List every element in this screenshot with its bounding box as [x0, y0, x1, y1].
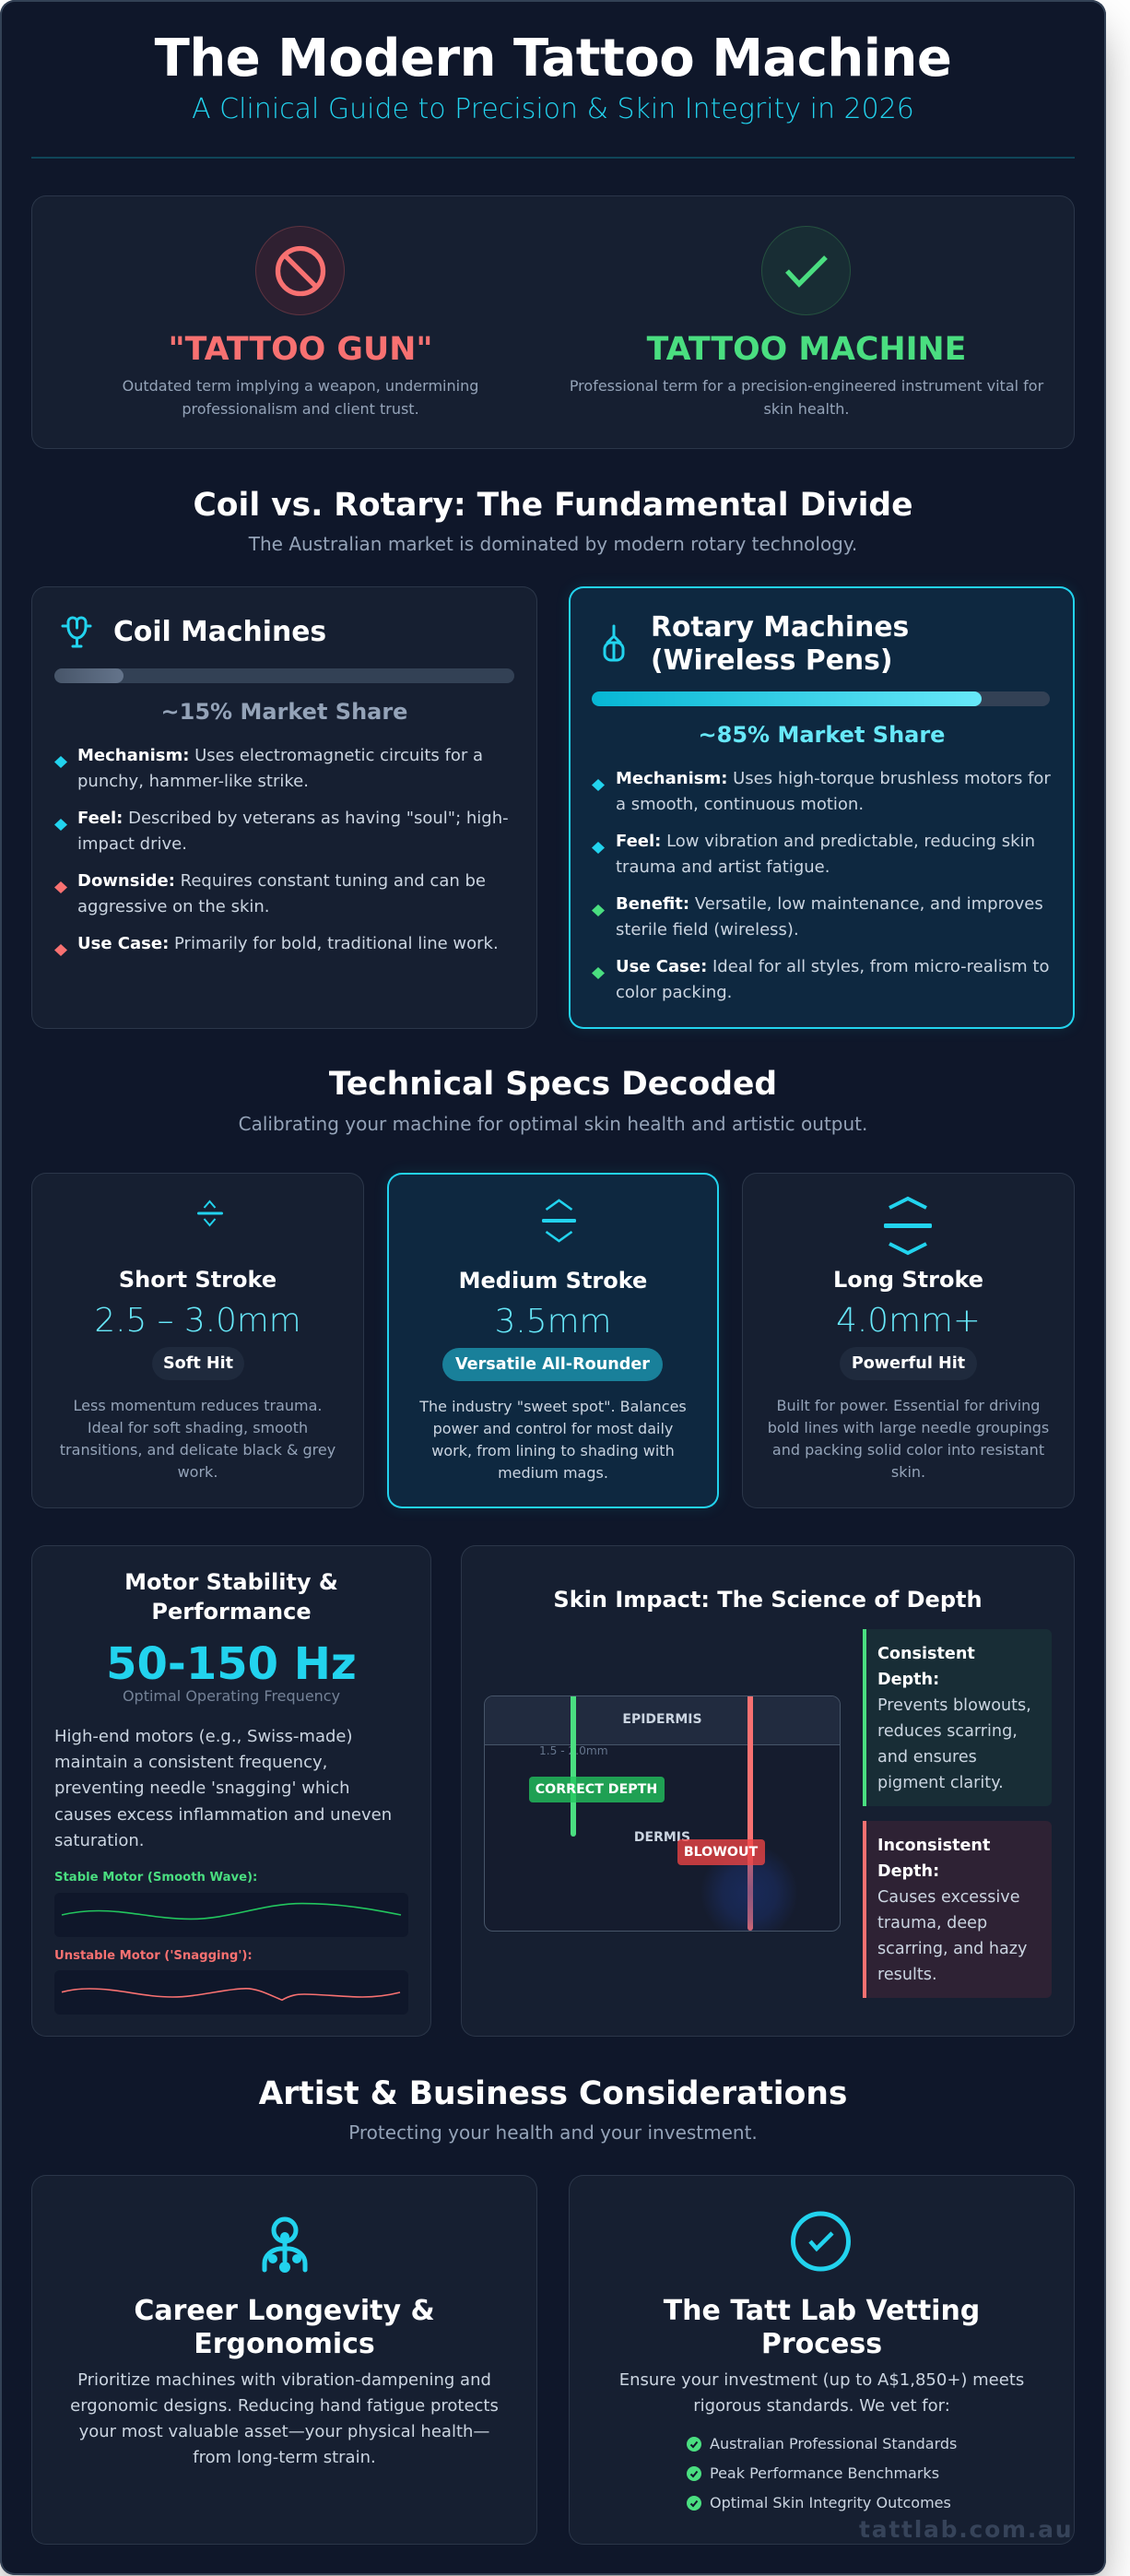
- section heading: artist and business: Artist & Business Considerations: [259, 2075, 847, 2112]
- correct term description: skin health.: [763, 400, 850, 418]
- medium stroke description: The industry "sweet spot". Balances: [419, 1398, 687, 1415]
- callout: inconsistent depth: results.: [877, 1966, 937, 1984]
- item: mechanism: [77, 746, 483, 791]
- short stroke description: Less momentum reduces trauma.: [74, 1397, 322, 1414]
- callout: inconsistent depth: [863, 1821, 1052, 1998]
- wrong term heading: "TATTOO GUN": [168, 331, 433, 368]
- frequency caption: Optimal Operating Frequency: [123, 1687, 340, 1705]
- rotary market share bar: [592, 691, 1050, 706]
- coil share label: ~15% Market Share: [161, 699, 407, 725]
- bullet: feel: [592, 842, 605, 854]
- item: downside: aggressive on the skin.: [77, 897, 270, 916]
- epidermis label: EPIDERMIS: [622, 1712, 702, 1727]
- panel: skin impact: [461, 1545, 1075, 2037]
- career description: [70, 2370, 499, 2467]
- item: benefit: Benefit: Versatile, low maintenance, and improves: [616, 894, 1043, 914]
- section subheading: calibrating: Calibrating your machine for optimal skin health and artistic output.: [239, 1113, 867, 1135]
- item: use case: Use Case: Ideal for all styles, from micro-realism to: [616, 957, 1049, 976]
- coil market share bar: [54, 668, 514, 683]
- medium stroke description: medium mags.: [498, 1464, 608, 1482]
- correct term description: Professional term for a precision-engineered instrument vital for: [570, 377, 1043, 395]
- career description: ergonomic designs. Reducing hand fatigue protects: [70, 2396, 499, 2416]
- panel: long stroke: [742, 1173, 1075, 1508]
- icon: medium stroke: [542, 1199, 576, 1243]
- medium stroke description: work, from lining to shading with: [431, 1442, 675, 1459]
- career description: Prioritize machines with vibration-dampening and: [77, 2370, 491, 2390]
- item: australian standards: Australian Professional Standards: [710, 2435, 957, 2452]
- dermis label: DERMIS: [634, 1830, 690, 1845]
- long stroke description: [768, 1397, 1049, 1481]
- career description: your most valuable asset—your physical health—: [79, 2422, 489, 2441]
- check: outcomes: [687, 2496, 701, 2511]
- section subheading: protecting: Protecting your health and your investment.: [348, 2121, 758, 2144]
- medium stroke badge: [442, 1348, 663, 1381]
- vetting title: [664, 2295, 980, 2360]
- motor description: causes excess inflammation and uneven: [54, 1805, 392, 1825]
- watermark: tattlab.com.au: [859, 2516, 1073, 2543]
- wrong term description: Outdated term implying a weapon, undermining: [123, 377, 478, 395]
- item: use case: [616, 957, 1049, 1002]
- section heading: coil vs rotary: Coil vs. Rotary: The Fundamental Divide: [193, 487, 913, 524]
- bullet: downside: [54, 881, 67, 893]
- wrong term description: professionalism and client trust.: [182, 400, 419, 418]
- motor description: saturation.: [54, 1831, 145, 1850]
- callout: inconsistent depth: Causes excessive: [877, 1888, 1020, 1907]
- vetting description: Ensure your investment (up to A$1,850+) meets: [619, 2370, 1024, 2390]
- medium stroke description: [419, 1398, 687, 1482]
- rotary title: [651, 611, 909, 677]
- long stroke title: Long Stroke: [833, 1267, 983, 1293]
- unstable motor label: Unstable Motor ('Snagging'):: [54, 1949, 253, 1963]
- panel: vetting process: [569, 2175, 1075, 2545]
- bullet: use case: [592, 967, 605, 979]
- rotary title: (Wireless Pens): [651, 644, 892, 677]
- item: use case: color packing.: [616, 983, 732, 1002]
- rotary title: Rotary Machines: [651, 611, 909, 644]
- motor title: [124, 1569, 338, 1625]
- motor description: preventing needle 'snagging' which: [54, 1778, 350, 1798]
- motor description: High-end motors (e.g., Swiss-made): [54, 1727, 353, 1746]
- short stroke description: [60, 1397, 335, 1481]
- callout: consistent depth: Prevents blowouts,: [877, 1696, 1031, 1715]
- coil title: Coil Machines: [113, 616, 326, 648]
- bullet: feel: [54, 819, 67, 831]
- long stroke description: and packing solid color into resistant: [772, 1441, 1044, 1459]
- panel: rotary machines: [569, 586, 1075, 1029]
- motor description: maintain a consistent frequency,: [54, 1753, 327, 1772]
- panel: short stroke: [31, 1173, 364, 1508]
- short stroke description: work.: [178, 1463, 218, 1481]
- short stroke description: Ideal for soft shading, smooth: [88, 1419, 308, 1436]
- short stroke value: 2.5 – 3.0mm: [94, 1302, 301, 1340]
- callout: inconsistent depth: trauma, deep: [877, 1914, 987, 1932]
- rotary feature list: [592, 769, 1051, 1002]
- callout: inconsistent depth: Inconsistent: [877, 1837, 990, 1855]
- item: mechanism: a smooth, continuous motion.: [616, 795, 864, 814]
- title: The Modern Tattoo Machine: [155, 29, 951, 89]
- icon: rotary pen: [603, 625, 625, 662]
- item: mechanism: [616, 769, 1051, 814]
- item: outcomes: Optimal Skin Integrity Outcomes: [710, 2494, 951, 2511]
- bullet: use case: [54, 944, 67, 956]
- icon: verified check circle: [791, 2211, 851, 2272]
- chart: stable wave: [54, 1893, 408, 1937]
- motor title: Motor Stability &: [124, 1569, 338, 1595]
- item: feel: [77, 809, 509, 854]
- blowout tag: [677, 1839, 765, 1865]
- callout: consistent depth: Consistent: [877, 1645, 975, 1663]
- item: downside: Downside: Requires constant tuning and can be: [77, 871, 486, 891]
- career title: [134, 2295, 435, 2360]
- correct term description: [570, 377, 1043, 418]
- check: performance: [687, 2466, 701, 2481]
- item: benefit: sterile field (wireless).: [616, 920, 799, 939]
- medium stroke description: power and control for most daily: [433, 1420, 673, 1437]
- item: benefit: [616, 894, 1043, 939]
- item: mechanism: Mechanism: Uses high-torque brushless motors for: [616, 769, 1051, 788]
- medium stroke title: Medium Stroke: [459, 1268, 647, 1294]
- icon: prohibited sign: [255, 226, 345, 315]
- callout: consistent depth: and ensures: [877, 1748, 977, 1767]
- green needle: [571, 1696, 576, 1837]
- item: performance: Peak Performance Benchmarks: [710, 2464, 939, 2482]
- bullet: mechanism: [592, 779, 605, 791]
- callout: inconsistent depth: scarring, and hazy: [877, 1940, 1027, 1958]
- career title: Career Longevity &: [134, 2295, 435, 2327]
- career description: from long-term strain.: [193, 2448, 376, 2467]
- long stroke value: 4.0mm+: [836, 1302, 981, 1340]
- vetting description: rigorous standards. We vet for:: [693, 2396, 950, 2416]
- long stroke badge: [840, 1347, 977, 1380]
- bullet: benefit: [592, 904, 605, 916]
- coil feature list: [54, 746, 509, 956]
- vetting description: [619, 2370, 1024, 2416]
- frequency value: 50-150 Hz: [106, 1638, 357, 1690]
- item: feel: Feel: Low vibration and predictable, reducing skin: [616, 832, 1035, 851]
- header divider: [31, 157, 1075, 159]
- short stroke title: Short Stroke: [119, 1267, 277, 1293]
- section subheading: market: The Australian market is dominated by modern rotary technology.: [249, 533, 857, 555]
- blowout tag: BLOWOUT: [684, 1845, 758, 1860]
- bullet: mechanism: [54, 756, 67, 768]
- item: feel: trauma and artist fatigue.: [616, 857, 830, 877]
- check: australian standards: [687, 2437, 701, 2452]
- panel: medium stroke: [387, 1173, 719, 1508]
- stable motor label: Stable Motor (Smooth Wave):: [54, 1871, 257, 1885]
- diagram: skin depth: [484, 1696, 841, 1932]
- item: feel: Feel: Described by veterans as having "soul"; high-: [77, 809, 509, 828]
- short stroke badge: Soft Hit: [163, 1354, 233, 1373]
- long stroke description: skin.: [891, 1463, 925, 1481]
- motor description: [54, 1727, 392, 1850]
- icon: check mark: [761, 226, 851, 315]
- subtitle: A Clinical Guide to Precision & Skin Integrity in 2026: [192, 93, 914, 125]
- callout: consistent depth: Depth:: [877, 1671, 939, 1689]
- vetting checklist: [687, 2435, 957, 2511]
- item: downside: [77, 871, 486, 916]
- correct term heading: TATTOO MACHINE: [647, 331, 966, 368]
- icon: ergonomic person: [262, 2216, 308, 2273]
- short stroke badge: [152, 1347, 244, 1380]
- section heading: technical specs: Technical Specs Decoded: [329, 1066, 777, 1103]
- panel: motor stability: [31, 1545, 431, 2037]
- wrong term description: [123, 377, 478, 418]
- panel: terminology comparison: [31, 195, 1075, 449]
- career title: Ergonomics: [194, 2328, 375, 2360]
- vetting title: The Tatt Lab Vetting: [664, 2295, 980, 2327]
- item: feel: [616, 832, 1035, 877]
- panel: career longevity: [31, 2175, 537, 2545]
- item: mechanism: Mechanism: Uses electromagnetic circuits for a: [77, 746, 483, 765]
- rotary share label: ~85% Market Share: [699, 722, 945, 748]
- correct depth tag: CORRECT DEPTH: [536, 1782, 657, 1797]
- motor title: Performance: [151, 1599, 312, 1625]
- icon: coil machine: [61, 616, 92, 647]
- depth range label: 1.5 - 2.0mm: [539, 1744, 608, 1757]
- long stroke description: Built for power. Essential for driving: [777, 1397, 1040, 1414]
- epidermis layer: [485, 1696, 840, 1745]
- medium stroke value: 3.5mm: [495, 1303, 611, 1341]
- correct depth tag: [529, 1777, 664, 1802]
- skin impact title: Skin Impact: The Science of Depth: [553, 1587, 983, 1613]
- red needle: [747, 1696, 753, 1931]
- item: use case: Use Case: Primarily for bold, traditional line work.: [77, 934, 499, 953]
- medium stroke badge: Versatile All-Rounder: [455, 1355, 650, 1374]
- callout: consistent depth: reduces scarring,: [877, 1722, 1018, 1741]
- callout: consistent depth: pigment clarity.: [877, 1774, 1004, 1792]
- callout: consistent depth: [863, 1629, 1052, 1806]
- icon: short stroke: [197, 1200, 223, 1226]
- icon: long stroke: [884, 1197, 932, 1256]
- callout: inconsistent depth: Depth:: [877, 1862, 939, 1881]
- panel: coil machines: [31, 586, 537, 1029]
- vetting title: Process: [761, 2328, 882, 2360]
- blowout glow: [700, 1844, 798, 1942]
- short stroke description: transitions, and delicate black & grey: [60, 1441, 335, 1459]
- item: feel: impact drive.: [77, 834, 187, 854]
- item: mechanism: punchy, hammer-like strike.: [77, 772, 309, 791]
- long stroke description: bold lines with large needle groupings: [768, 1419, 1049, 1436]
- chart: unstable wave: [54, 1970, 408, 2015]
- long stroke badge: Powerful Hit: [852, 1354, 965, 1373]
